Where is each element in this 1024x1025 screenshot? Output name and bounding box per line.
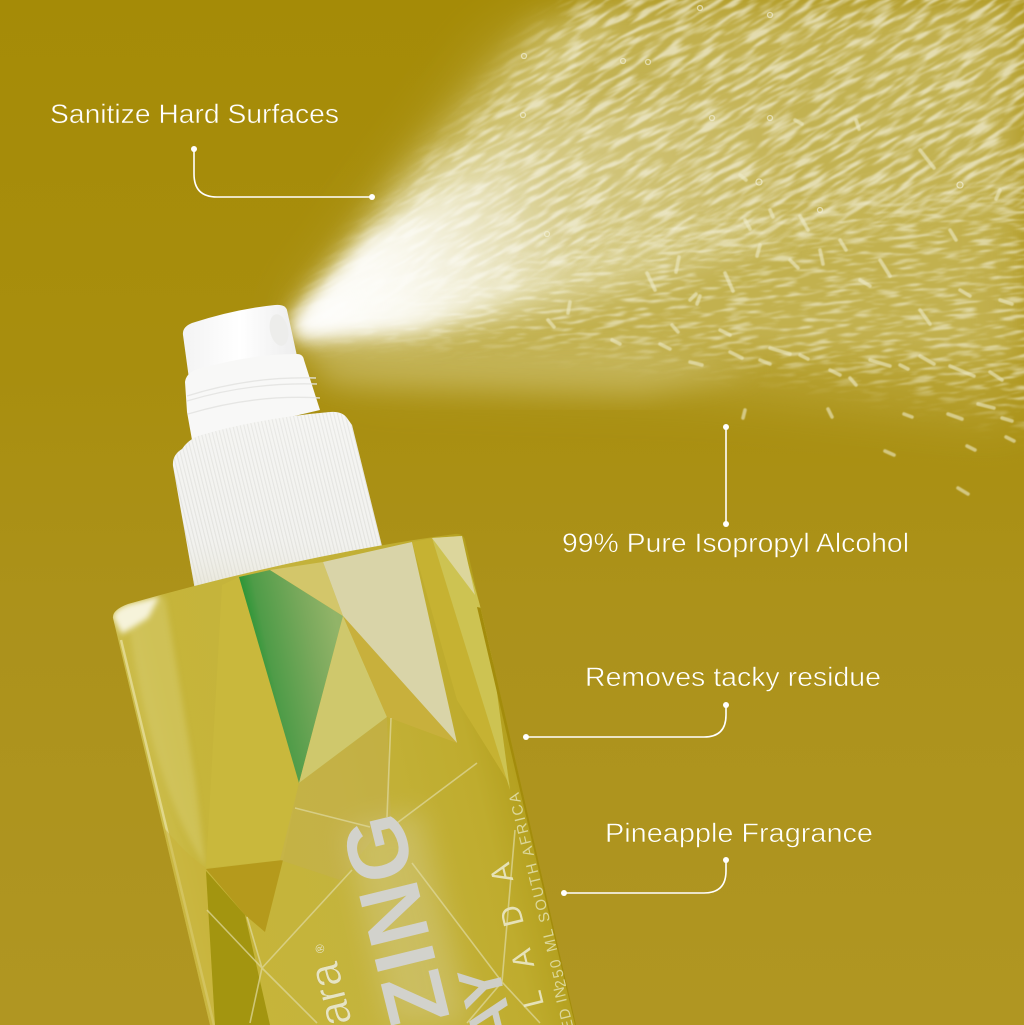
- gold facet: [343, 616, 457, 743]
- right side shade strip: [477, 607, 576, 1025]
- label text: Pineapple Fragrance: [605, 818, 873, 848]
- upper edge glow: [290, 20, 620, 325]
- tan top facet: [270, 562, 343, 616]
- leader line: [561, 857, 729, 896]
- spray bottle: [100, 305, 600, 1025]
- lower left dark facet: [206, 871, 270, 1025]
- mist halo: [292, 0, 1024, 420]
- rim highlight: [113, 596, 160, 634]
- spray lower broad fan: [300, 190, 1024, 360]
- bottle body: [100, 520, 600, 1025]
- callout: sanitize hard surfaces: [50, 99, 375, 200]
- collar: [185, 354, 320, 440]
- left curved facet: [163, 827, 215, 1025]
- origin text: 250 ML SOUTH AFRICA: [505, 789, 570, 990]
- label text: Removes tacky residue: [585, 662, 881, 692]
- right sliver facet: [432, 536, 510, 790]
- registered mark: ®: [312, 943, 328, 955]
- leader line: [191, 146, 375, 200]
- ribbed cap: [173, 412, 382, 590]
- left edge highlight: [121, 640, 214, 1025]
- left middle facet: [206, 577, 299, 868]
- callout: pineapple fragrance: [561, 818, 873, 896]
- leader line: [723, 424, 729, 527]
- callout: isopropyl alcohol: [562, 424, 909, 558]
- scattered droplets: [548, 120, 1014, 494]
- left pale facet: [128, 596, 206, 868]
- lower left gold facet: [206, 860, 283, 932]
- right upper facet: [412, 538, 510, 785]
- actuator: [183, 305, 297, 386]
- body base: [113, 534, 575, 1025]
- spray pump head: [183, 305, 320, 440]
- callout: removes tacky residue: [523, 662, 881, 740]
- collar rings: [187, 378, 320, 414]
- light yellow facet: [299, 616, 387, 783]
- central glow: [345, 810, 470, 1025]
- dense spray fan: [292, 90, 780, 338]
- nozzle jet: [292, 130, 600, 338]
- spray mist: [276, 0, 1024, 496]
- right corner pale facet: [432, 536, 475, 595]
- label lines: [207, 718, 540, 1023]
- spray upper broad fan: [296, 0, 1024, 322]
- round droplets: [520, 6, 963, 236]
- lower glow band: [300, 345, 760, 395]
- upper streak texture: [290, 0, 1024, 314]
- pale facet: [323, 542, 457, 743]
- label text: 99% Pure Isopropyl Alcohol: [562, 528, 909, 558]
- nozzle: [267, 312, 291, 348]
- leader line: [523, 702, 729, 740]
- central tan facet: [280, 717, 391, 880]
- lower streak texture: [334, 164, 1024, 430]
- label text: Sanitize Hard Surfaces: [50, 99, 339, 129]
- green facet: [239, 570, 343, 783]
- fragrance name: LADA: [479, 836, 551, 1011]
